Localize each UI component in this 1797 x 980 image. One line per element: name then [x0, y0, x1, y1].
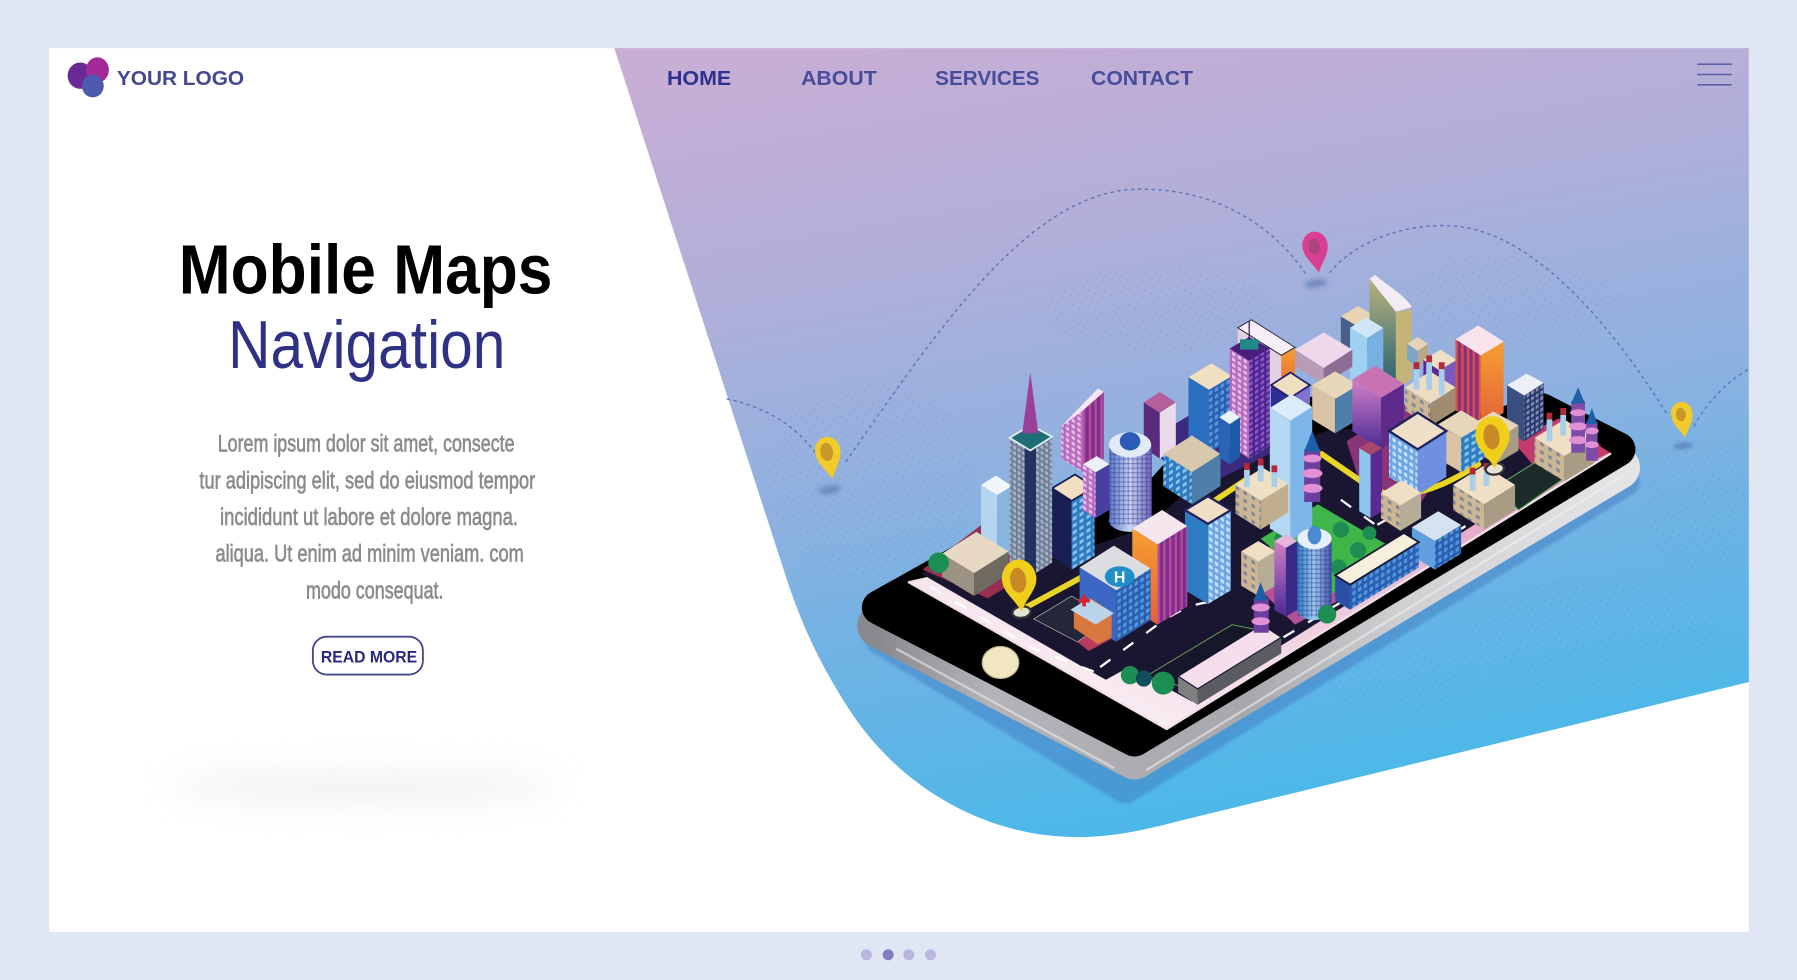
building: light blue tower rear [1350, 317, 1383, 395]
logo wordmark: YOUR LOGO [117, 67, 244, 90]
nav: services: SERVICES [935, 67, 1039, 90]
hospital H mark: H [1114, 568, 1125, 586]
building: thin tower center-right [1359, 441, 1382, 518]
nav: home: HOME [667, 67, 731, 90]
city pin: left large [999, 557, 1042, 620]
subtitle: Navigation [228, 308, 505, 383]
city park [1261, 504, 1392, 596]
road lane markings [931, 445, 1599, 676]
nav: about: ABOUT [801, 67, 877, 90]
building: beige mid low [1241, 541, 1276, 596]
building: long pink roof front [1178, 625, 1281, 705]
tower stack far right [1569, 387, 1599, 461]
building: factory lower right [1453, 463, 1515, 530]
building: beige block rear [1341, 306, 1375, 361]
city blocks [923, 390, 1610, 651]
logo icon [68, 57, 109, 97]
smartphone [879, 275, 1625, 770]
building: beige small right [1381, 480, 1421, 531]
body text: tur adipiscing elit, sed do eiusmod tempor [199, 467, 535, 494]
read more button [313, 637, 423, 675]
building: factory center [1235, 458, 1288, 530]
building: navy roofed block [1271, 373, 1310, 426]
gradient blob [614, 48, 1749, 837]
building: orange striped tower right [1455, 326, 1504, 426]
screen map base [909, 420, 1610, 729]
dashed route arcs [727, 189, 1749, 462]
building: orange tall front [1132, 510, 1187, 625]
trees [928, 552, 1336, 695]
map pin: left yellow [809, 435, 847, 496]
map pin: right yellow [1668, 400, 1697, 451]
body text: incididunt ut labore et dolore magna. [220, 504, 518, 531]
building: pink slanted tower [1061, 389, 1104, 472]
read more button: READ MORE [321, 648, 417, 667]
soft floor shadow [170, 773, 559, 800]
nav: contact: CONTACT [1091, 67, 1193, 90]
navigation menu [667, 67, 1193, 90]
building: purple blocks [1352, 366, 1404, 449]
building: cylinder tower [1109, 432, 1152, 532]
building: small hex purple [1144, 392, 1176, 458]
parking lots [1034, 458, 1568, 688]
halftone dot patches [768, 254, 1748, 713]
building: cylinder park tower [1297, 526, 1332, 620]
phone silver body [879, 429, 1618, 758]
building: small purple tower park [1274, 534, 1297, 617]
building: factory far right [1535, 408, 1594, 481]
city pin: right large [1473, 414, 1515, 477]
building: beige right of center [1312, 371, 1358, 433]
building: glass left [981, 476, 1012, 562]
title: Mobile Maps [179, 230, 552, 308]
building: hospital [1080, 546, 1151, 642]
building: glass curved [1389, 413, 1446, 495]
building: long flat glass [1335, 533, 1419, 610]
building: teal thin block [1219, 410, 1240, 464]
body text: aliqua. Ut enim ad minim veniam. com [215, 541, 524, 568]
building: beige right [1438, 410, 1484, 472]
building: beige roof behind pin [1470, 411, 1519, 464]
building: dark navy box [1052, 475, 1094, 570]
building: tan small rear right [1407, 337, 1428, 367]
logo [68, 57, 244, 97]
tower stack center [1302, 431, 1323, 502]
building: spire skyscraper [1010, 373, 1052, 577]
building: small beige left [942, 532, 1009, 596]
building: olive slanted tower [1370, 275, 1412, 390]
building: purple central tower [1230, 321, 1270, 458]
road network [920, 415, 1602, 701]
building: beige block mid [1163, 436, 1221, 504]
building: blue beige roof [1188, 363, 1232, 453]
phone home button [982, 646, 1019, 679]
yellow route [1026, 454, 1478, 607]
map pin: top pink [1297, 230, 1333, 289]
building: factory rear [1405, 355, 1455, 426]
tower stack front [1251, 582, 1270, 633]
hamburger menu icon [1697, 64, 1732, 85]
body text [199, 431, 535, 604]
building: clinic with red cross [1070, 595, 1114, 644]
phone edge highlight [896, 475, 1625, 770]
phone ground shadow [880, 436, 1625, 789]
body text: Lorem ipsum dolor sit amet, consecte [218, 431, 515, 458]
building: orange behind center [1238, 320, 1295, 395]
body text: modo consequat. [306, 577, 444, 604]
building: light tower right [1507, 374, 1544, 441]
building: pale pink roof [1295, 332, 1352, 384]
phone black screen [879, 410, 1618, 739]
building: blue cube [1412, 511, 1461, 570]
building: tall glass center [1270, 394, 1312, 541]
carousel dots [861, 949, 936, 960]
building: small tower [1083, 456, 1109, 518]
building: blue mid tower [1185, 496, 1231, 604]
building: purple striped rear right [1423, 350, 1457, 410]
